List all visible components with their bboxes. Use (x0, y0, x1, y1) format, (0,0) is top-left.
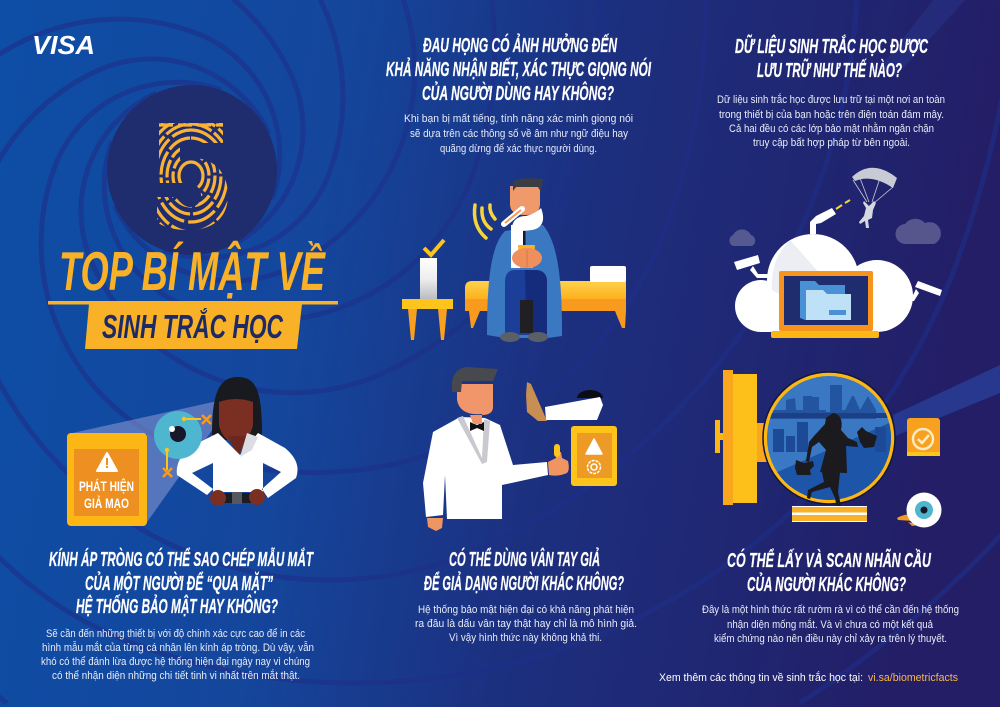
text: sore throat body: quãng dừng để xác thực người dùng. (440, 143, 597, 155)
text: contact lens body: khó có thể đánh lừa được hệ thống hiện đại ngày nay vì chúng (41, 656, 310, 668)
text: sore throat body: sẽ dựa trên các thông số về âm như ngữ điệu hay (410, 128, 628, 140)
icon: check tablet (907, 418, 940, 456)
icon: scanned eye (154, 411, 211, 477)
heading: fake fingerprint: ĐỂ GIẢ DẠNG NGƯỜI KHÁC KHÔNG? (424, 571, 624, 595)
icon: vault door (715, 370, 771, 505)
text: data storage body: Dữ liệu sinh trắc học được lưu trữ tại một nơi an toàn (717, 93, 945, 106)
text: eye scan body: nhận diện mống mắt. Và vì chưa có một kết quả (727, 618, 934, 631)
heading: contact lens (49, 547, 314, 618)
text: data storage body (717, 93, 945, 149)
footer link: Xem thêm các thông tin về sinh trắc học tại: (659, 671, 863, 684)
icon: security cameras (734, 208, 942, 301)
icon: parachutist (852, 168, 897, 228)
footer link (659, 671, 958, 684)
icon: alert tablet: GIẢ MẠO (84, 495, 129, 511)
text: fake fingerprint body: ra đâu là dấu vân tay thật hay chỉ là mô hình giả. (415, 618, 637, 630)
icon: laptop with folder (771, 271, 879, 338)
panel: fake eye lens (67, 377, 298, 526)
heading: fake fingerprint (424, 547, 624, 595)
icon: stop hand (526, 382, 603, 421)
icon: thief silhouette (795, 413, 877, 517)
text: fake fingerprint body: Vì vậy hình thức này không khả thi. (449, 632, 602, 644)
heading: sore throat: KHẢ NĂNG NHẬN BIẾT, XÁC THỰC GIỌNG NÓI (386, 57, 651, 81)
heading: sore throat: ĐAU HỌNG CÓ ẢNH HƯỞNG ĐẾN (423, 33, 617, 57)
panel: vault thief (715, 370, 942, 528)
text: data storage body: trong thiết bị của bạn hoặc trên điện toán đám mây. (719, 109, 944, 121)
icon: laser dashes (836, 200, 850, 209)
text: eye scan body (702, 604, 959, 645)
icon: fingerprint tablet (571, 426, 617, 486)
text: contact lens body (41, 628, 314, 682)
footer link: vi.sa/biometricfacts (868, 672, 958, 684)
icon: small clouds (729, 219, 941, 246)
text: fake fingerprint body: Hệ thống bảo mật hiện đại có khả năng phát hiện (418, 604, 634, 616)
heading: contact lens: HỆ THỐNG BẢO MẬT HAY KHÔNG? (76, 594, 278, 618)
logo: VISA: VISA (32, 30, 95, 60)
light beam top right (880, 0, 965, 75)
text: data storage body: Cả hai đều có các lớp bảo mật nhằm ngăn chặn (729, 122, 934, 135)
heading: data storage (735, 34, 928, 82)
beam (68, 400, 225, 525)
heading: eye scan (727, 548, 931, 596)
icon: bed (465, 266, 626, 328)
icon: eyeball (897, 492, 942, 528)
text: sore throat body (404, 113, 633, 155)
icon: table with smart speaker (402, 240, 453, 340)
title rule (48, 301, 338, 304)
title: top bi mat ve: TOP BÍ MẬT VỀ (59, 240, 327, 302)
central barrel circle (107, 85, 277, 255)
icon: alert tablet: PHÁT HIỆN (79, 477, 134, 494)
icon: sick man in blanket (487, 178, 562, 342)
icon: gold steps (792, 506, 867, 522)
subtitle banner: SINH TRẮC HỌC (102, 308, 284, 345)
text: fake fingerprint body (415, 604, 637, 644)
text: sore throat body: Khi bạn bị mất tiếng, tính năng xác minh giọng nói (404, 113, 633, 125)
icon: fingerprint number 5 (157, 123, 228, 230)
text: eye scan body: Đây là một hình thức rất rườm rà vì có thể cần đến hệ thống (702, 604, 959, 616)
panel: fake finger (423, 367, 617, 531)
text: data storage body: truy cập bất hợp pháp từ bên ngoài. (753, 137, 910, 149)
icon: sound waves (474, 205, 495, 238)
heading: contact lens: KÍNH ÁP TRÒNG CÓ THỂ SAO CHÉP MẪU MẮT (49, 547, 314, 571)
icon: cloud (735, 234, 913, 332)
icon: woman (177, 377, 298, 506)
panel: speaker and sick man (402, 178, 626, 342)
text: contact lens body: Sẽ cần đến những thiết bị với độ chính xác cực cao để in các (46, 628, 305, 640)
panel: cloud storage (729, 168, 942, 338)
subtitle banner (85, 304, 302, 349)
heading: fake fingerprint: CÓ THỂ DÙNG VÂN TAY GIẢ (449, 547, 600, 571)
text: eye scan body: kiểm chứng nào nên điều này chỉ xảy ra trên lý thuyết. (714, 633, 947, 645)
heading: contact lens: CỦA MỘT NGƯỜI ĐỂ “QUA MẶT” (85, 571, 273, 595)
heading: sore throat: CỦA NGƯỜI DÙNG HAY KHÔNG? (422, 81, 614, 105)
icon: alert tablet (67, 433, 147, 526)
heading: sore throat (386, 33, 651, 105)
icon: vault interior (763, 370, 896, 506)
text: contact lens body: có thể nhận diện những chi tiết tinh vi nhất trên mắt thật. (52, 669, 300, 682)
text: contact lens body: hình mẫu mắt của từng cá nhân lên kính áp tròng. Dù vậy, vẫn (42, 641, 314, 654)
light beam right (893, 365, 1000, 436)
icon: man in white tuxedo (423, 367, 569, 531)
heading: data storage: LƯU TRỮ NHƯ THẾ NÀO? (757, 58, 902, 82)
